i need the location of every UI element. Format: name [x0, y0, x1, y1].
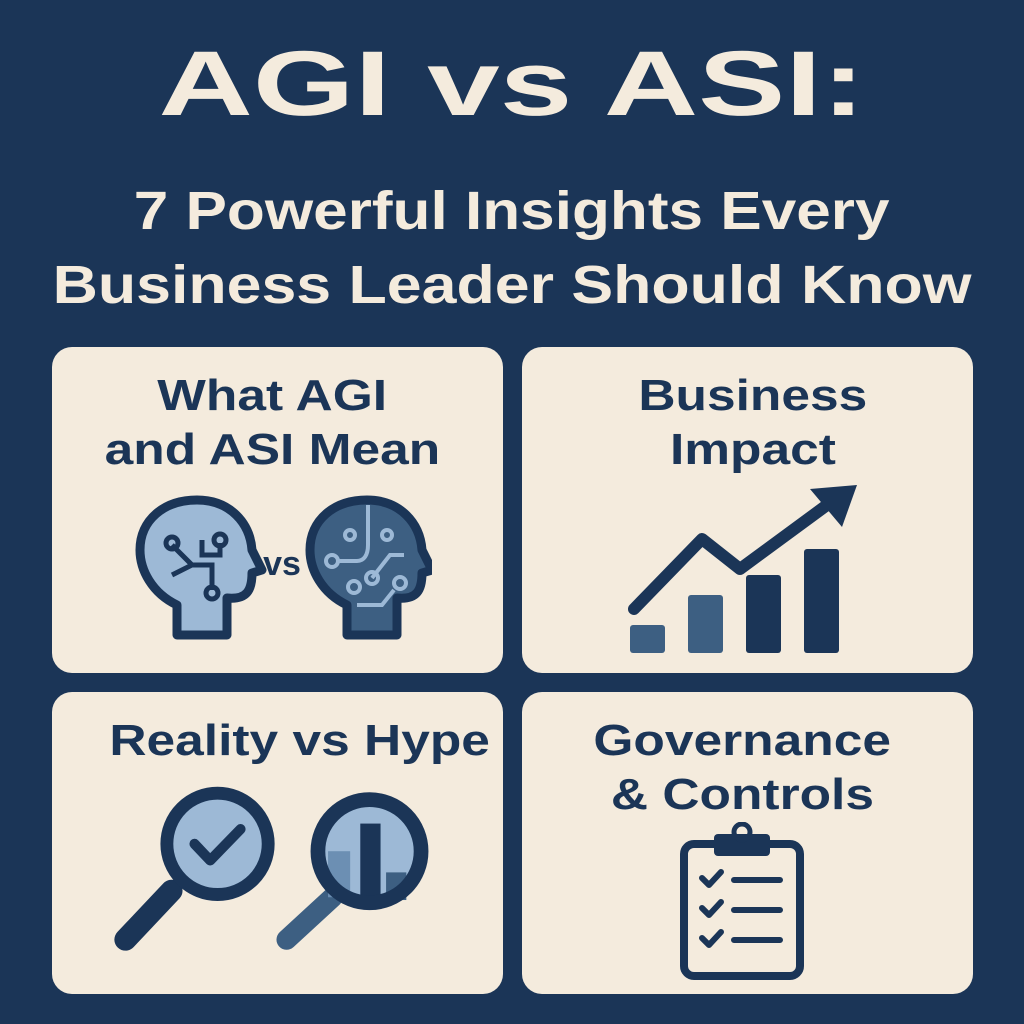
- heading: Business: [638, 371, 867, 420]
- heading: and ASI Mean: [105, 425, 440, 474]
- heading: [105, 371, 440, 474]
- heading: What AGI: [158, 371, 387, 420]
- subtitle: Business Leader Should Know: [53, 255, 971, 315]
- heading: & Controls: [611, 770, 874, 819]
- heading: [594, 716, 891, 819]
- icon: clipboard checklist: [680, 822, 804, 980]
- icon: heads vs: [136, 496, 432, 640]
- panel: reality vs hype: [52, 692, 503, 994]
- title: AGI vs ASI:: [159, 33, 865, 135]
- panel: what AGI and ASI mean: [52, 347, 503, 673]
- subtitle: 7 Powerful Insights Every: [134, 181, 890, 241]
- heading: Reality vs Hype: [109, 716, 490, 765]
- icon: heads vs: vs: [263, 545, 301, 583]
- panel: governance & controls: [522, 692, 973, 994]
- heading: [638, 371, 867, 474]
- icon: growth chart: [628, 485, 857, 653]
- icon: magnifiers: [114, 786, 428, 951]
- heading: Impact: [670, 425, 835, 474]
- subtitle: [53, 181, 972, 315]
- panel: business impact: [522, 347, 973, 673]
- heading: Governance: [594, 716, 891, 765]
